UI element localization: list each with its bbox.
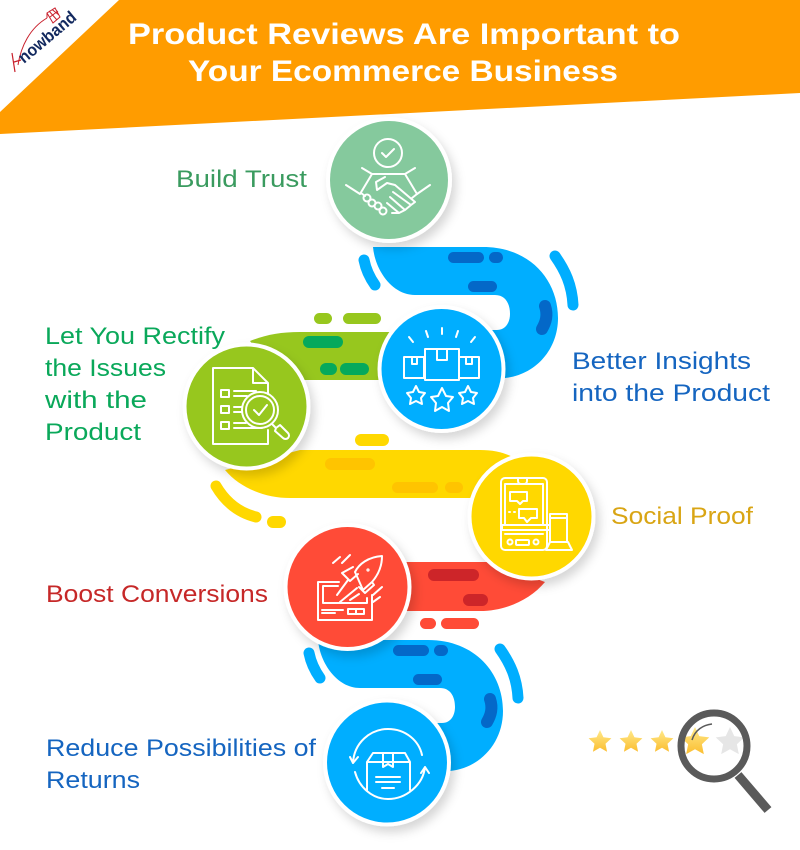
ribbon: lime <box>250 313 400 380</box>
title <box>128 18 680 88</box>
label: better insights: into the Product <box>572 380 770 407</box>
ribbon: blue lower <box>309 640 518 771</box>
label: reduce returns <box>46 735 316 794</box>
label: reduce returns: Reduce Possibilities of <box>46 735 316 762</box>
label: better insights <box>572 348 770 407</box>
title: Product Reviews Are Important to <box>128 18 680 51</box>
label: let you rectify: Let You Rectify <box>45 323 225 350</box>
node: better insights <box>378 305 506 433</box>
node: rectify issues <box>182 342 310 470</box>
title: Your Ecommerce Business <box>188 55 618 88</box>
icon: checklist and magnifier <box>213 368 289 444</box>
node: social proof <box>468 452 596 580</box>
label: let you rectify: with the <box>44 387 147 414</box>
node: boost conversions <box>284 523 412 651</box>
ribbon: yellow <box>216 434 520 528</box>
rating stars with magnifier <box>589 713 768 810</box>
label: social proof: Social Proof <box>611 503 753 530</box>
label: let you rectify: the Issues <box>45 355 166 382</box>
node: build trust <box>326 117 452 243</box>
label: boost conversions: Boost Conversions <box>46 581 268 608</box>
header banner <box>0 0 800 134</box>
logo: Knowband: nowband <box>14 8 80 67</box>
node: reduce returns <box>323 698 451 826</box>
ribbon: blue upper <box>364 247 573 378</box>
label: let you rectify <box>44 323 225 446</box>
icon: rocket and screen <box>318 555 382 620</box>
ribbon: red <box>400 562 545 629</box>
label: build trust: Build Trust <box>176 166 307 193</box>
icon: phone with chat bubbles <box>501 478 572 550</box>
label: let you rectify: Product <box>45 419 141 446</box>
label: better insights: Better Insights <box>572 348 751 375</box>
icon: handshake <box>346 139 430 214</box>
icon: boxes and stars <box>404 328 479 411</box>
icon: box with return arrows <box>350 729 429 799</box>
label: reduce returns: Returns <box>46 767 140 794</box>
